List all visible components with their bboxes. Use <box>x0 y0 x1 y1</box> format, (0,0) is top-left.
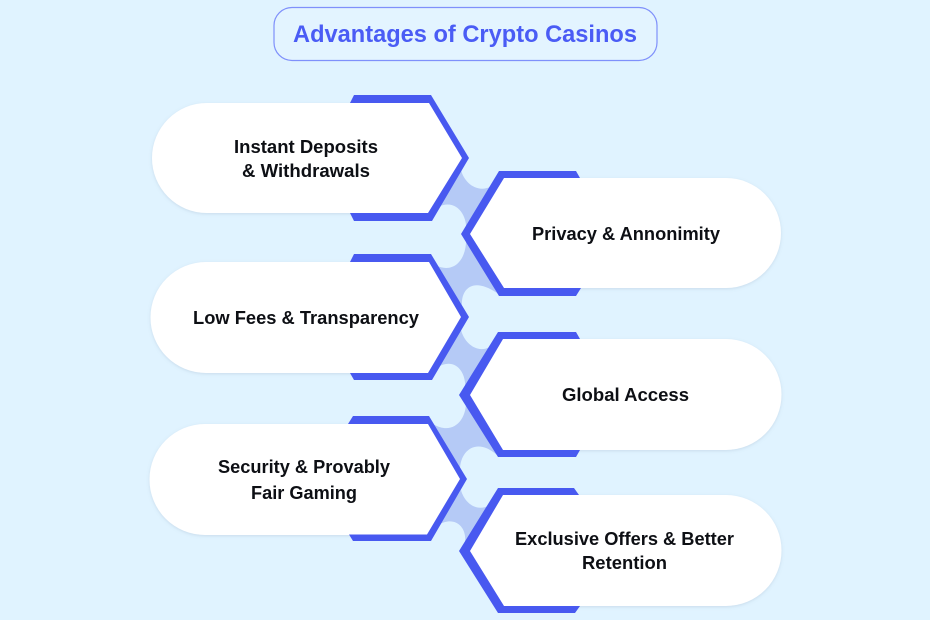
card: Exclusive Offers & Better Retention: Retention <box>582 553 667 573</box>
card: Exclusive Offers & Better Retention: Exclusive Offers & Better <box>515 529 734 549</box>
card: Instant Deposits & Withdrawals <box>152 95 469 221</box>
card: Global Access <box>459 332 782 457</box>
card: Low Fees & Transparency <box>151 254 469 380</box>
card: Global Access: Global Access <box>562 385 689 405</box>
connectors between cards <box>433 170 497 542</box>
card: Low Fees & Transparency: Low Fees & Transparency <box>193 308 419 328</box>
title <box>274 8 657 60</box>
card: Instant Deposits & Withdrawals: Instant Deposits <box>234 137 378 157</box>
card: Privacy & Annonimity: Privacy & Annonimity <box>532 224 720 244</box>
card: Instant Deposits & Withdrawals: & Withdrawals <box>242 161 370 181</box>
card: Privacy & Annonimity <box>461 171 781 296</box>
card: Security & Provably Fair Gaming <box>150 416 467 541</box>
card: Exclusive Offers & Better Retention <box>459 488 782 613</box>
title: Advantages of Crypto Casinos <box>293 21 637 48</box>
card: Security & Provably Fair Gaming: Security & Provably <box>218 457 390 477</box>
card: Security & Provably Fair Gaming: Fair Gaming <box>251 483 357 503</box>
